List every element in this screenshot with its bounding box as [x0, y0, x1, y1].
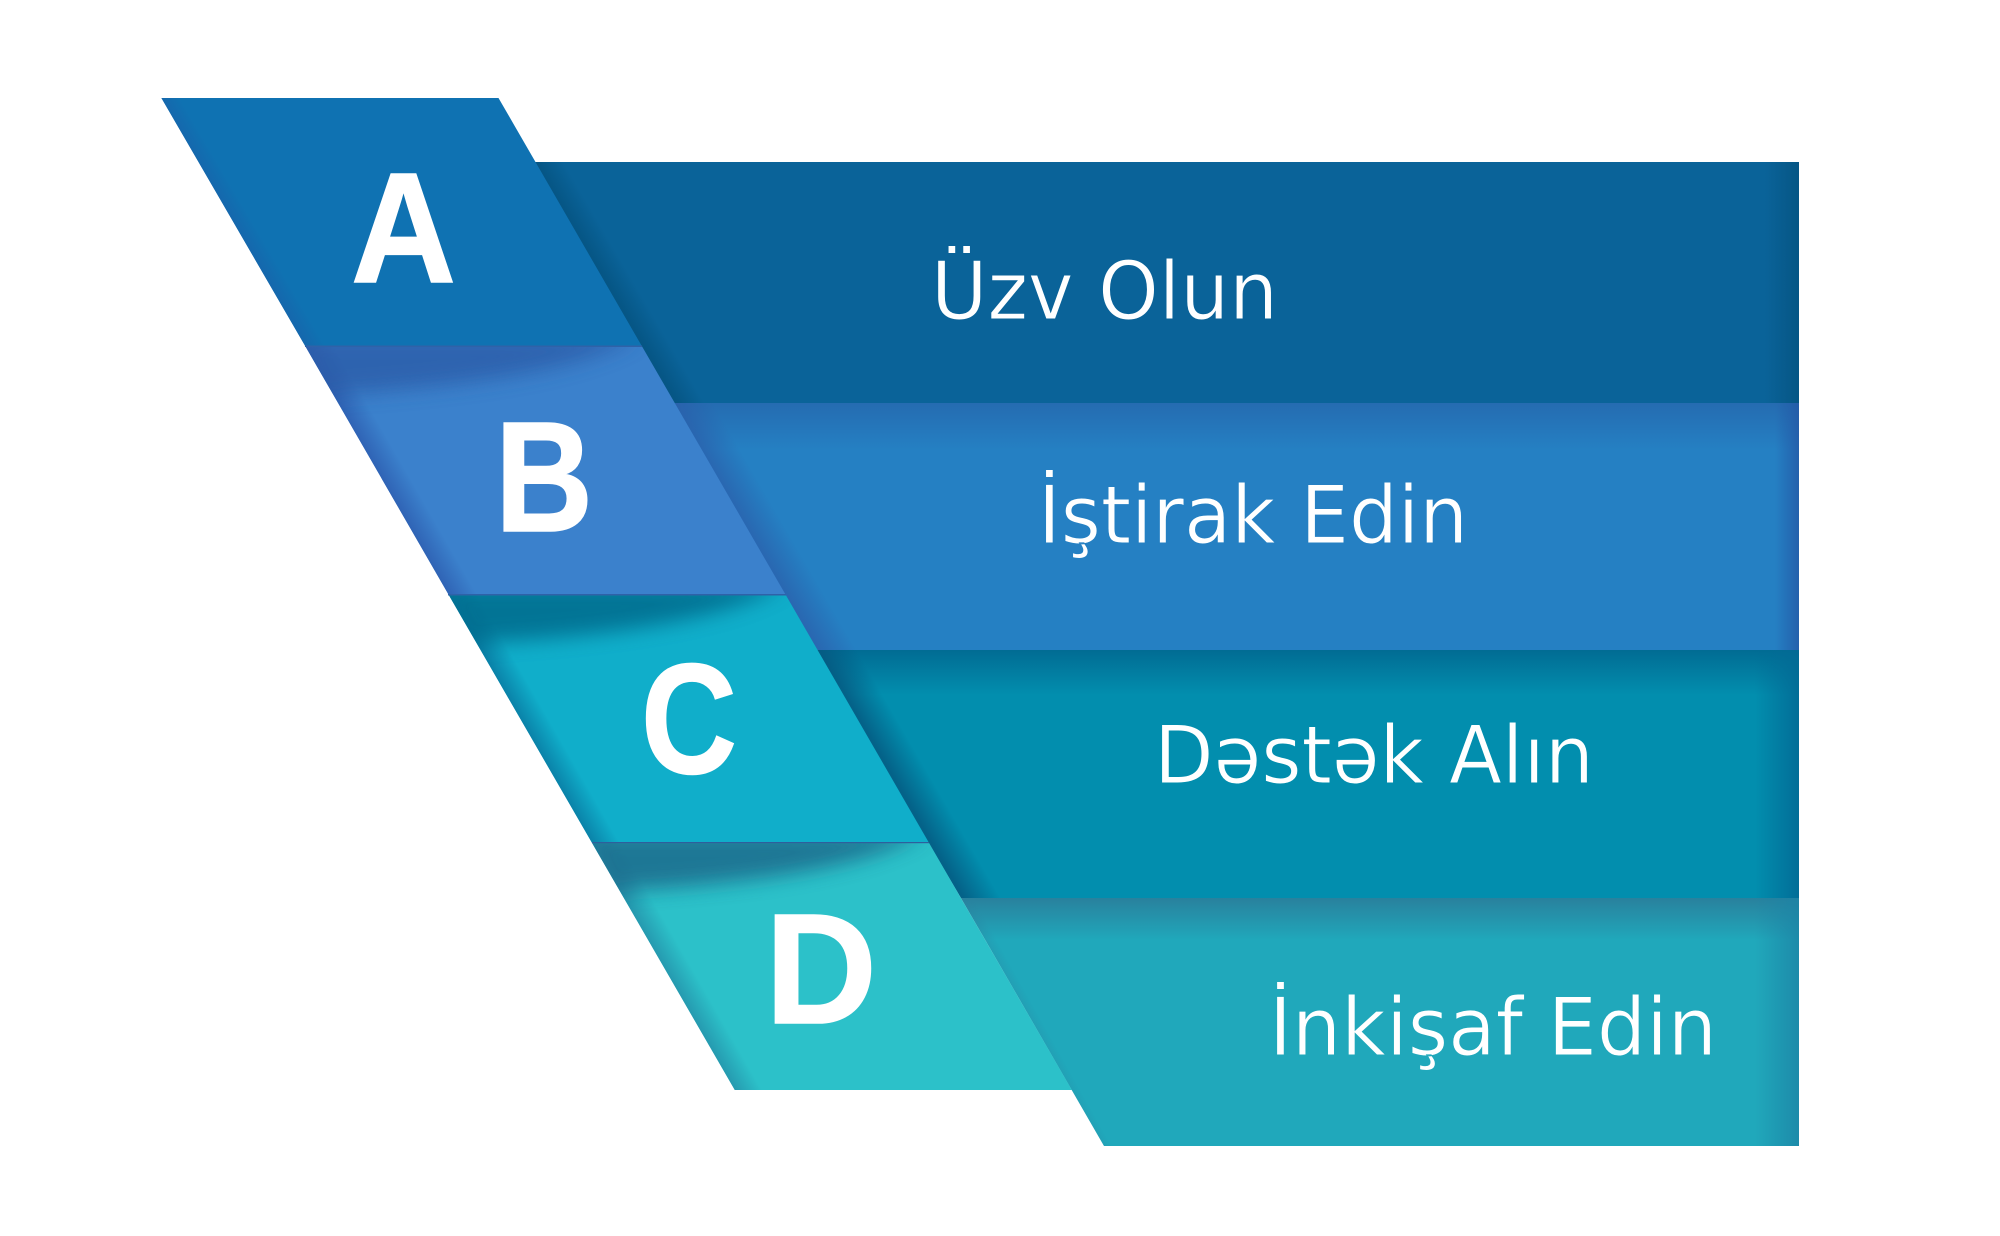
label tab D — [578, 832, 1072, 1090]
label tab C — [435, 584, 929, 842]
letter D: D — [765, 882, 877, 1057]
label tab B — [290, 335, 786, 594]
text: İştirak Edin: İştirak Edin — [1038, 469, 1468, 562]
letter A: A — [351, 141, 456, 316]
text: Üzv Olun: Üzv Olun — [931, 245, 1278, 338]
band 2: İştirak Edin — [672, 403, 1799, 650]
letter B: B — [495, 390, 593, 565]
label tab A — [161, 98, 642, 346]
band 3: Dəstək Alın — [815, 650, 1799, 898]
text: İnkişaf Edin: İnkişaf Edin — [1269, 981, 1717, 1074]
band 4: İnkişaf Edin — [961, 898, 1799, 1146]
text: Dəstək Alın: Dəstək Alın — [1154, 709, 1594, 802]
band 1: Üzv Olun — [533, 162, 1799, 403]
letter C: C — [641, 632, 737, 807]
